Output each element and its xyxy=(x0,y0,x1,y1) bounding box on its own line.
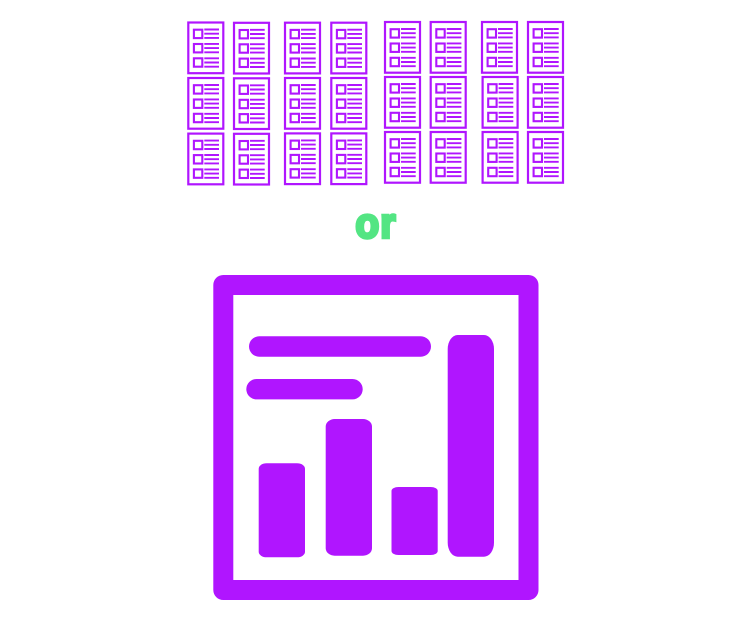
text line 1 xyxy=(249,336,431,357)
bar 4 xyxy=(448,335,494,557)
bar 2 xyxy=(326,419,372,556)
chart frame xyxy=(213,275,539,600)
bar 1 xyxy=(259,463,305,557)
right document group xyxy=(385,22,563,183)
left document group xyxy=(188,22,366,184)
icon: bar chart report xyxy=(213,275,539,600)
heading: or: or xyxy=(356,199,396,247)
bar 3 xyxy=(392,487,438,555)
document icon grid xyxy=(188,22,563,184)
text line 2 xyxy=(246,379,363,399)
